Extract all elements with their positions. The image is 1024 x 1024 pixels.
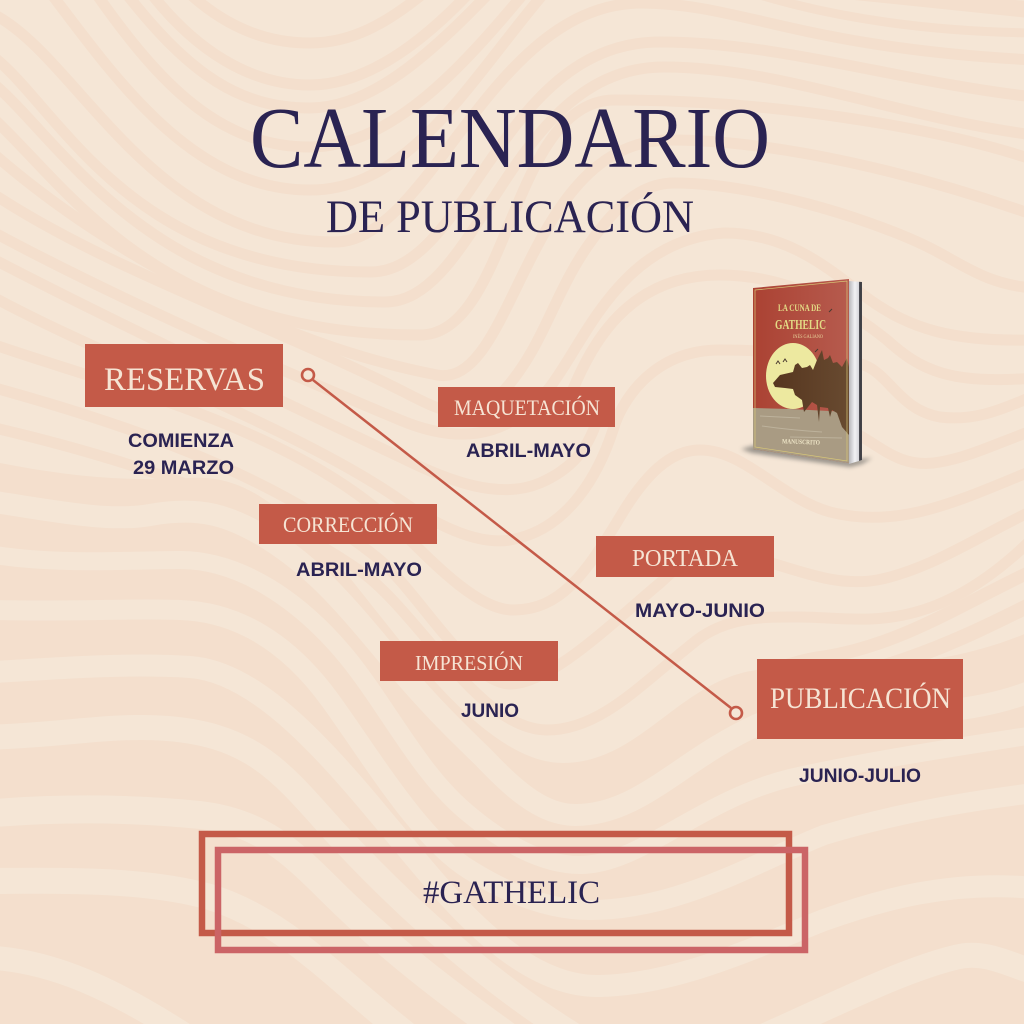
step: impresión [380, 641, 558, 681]
title: CALENDARIO [250, 89, 770, 186]
date: abril-mayo: ABRIL-MAYO [296, 560, 422, 581]
date: comienza 29 marzo: COMIENZA [128, 431, 234, 452]
book mockup: La cuna de Gathelic: GATHELIC [775, 318, 826, 333]
milestone: reservas: RESERVAS [104, 362, 265, 398]
hashtag double frame [202, 834, 805, 950]
step: maquetación [438, 387, 615, 427]
date: junio-julio: JUNIO-JULIO [799, 766, 921, 787]
date: junio: JUNIO [461, 701, 519, 722]
step: corrección [259, 504, 437, 544]
hashtag double frame: #GATHELIC [423, 875, 600, 911]
step: corrección: CORRECCIÓN [283, 512, 413, 537]
date: mayo-junio: MAYO-JUNIO [635, 601, 765, 622]
book mockup: La cuna de Gathelic: LA CUNA DE [778, 303, 821, 313]
date: abril-mayo: ABRIL-MAYO [466, 441, 591, 462]
step: portada [596, 536, 774, 577]
milestone: publicación [757, 659, 963, 739]
milestone: reservas [85, 344, 283, 407]
subtitle: DE PUBLICACIÓN [326, 191, 694, 243]
timeline connector [302, 369, 742, 719]
step: maquetación: MAQUETACIÓN [454, 395, 600, 420]
step: impresión: IMPRESIÓN [415, 651, 523, 675]
book mockup: La cuna de Gathelic [741, 279, 872, 467]
milestone: publicación: PUBLICACIÓN [770, 682, 951, 715]
book mockup: La cuna de Gathelic: INÉS GALIANO [793, 334, 823, 340]
book mockup: La cuna de Gathelic: MANUSCRITO [782, 438, 820, 447]
step: portada: PORTADA [632, 546, 739, 572]
date: comienza 29 marzo: 29 MARZO [133, 458, 234, 479]
date: comienza 29 marzo [128, 431, 234, 479]
